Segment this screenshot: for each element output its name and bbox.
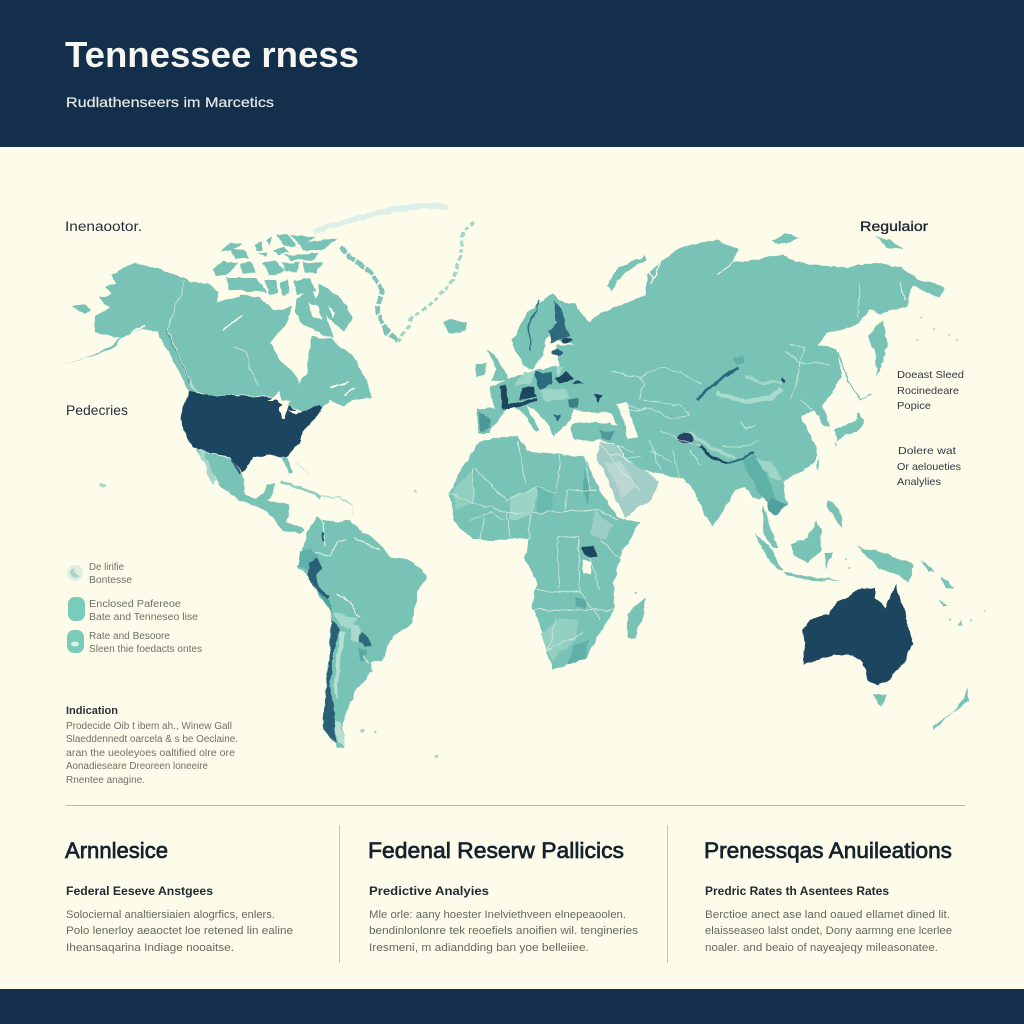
right note one <box>897 369 964 412</box>
panel: column two: bendinlonlonre tek reoefiels anoifien wil. tengineries <box>369 925 639 937</box>
panel: column one: Iheansaqarina Indiage nooaitse. <box>66 942 234 954</box>
world map <box>60 206 986 758</box>
right note one: Doeast Sleed <box>897 369 964 381</box>
legend text three: Sleen thie foedacts ontes <box>89 644 202 655</box>
legend text two <box>89 599 198 623</box>
indication note <box>66 705 238 786</box>
tasmania <box>873 694 887 707</box>
panel: column three: noaler. and beaio of nayeajeqy mileasonatee. <box>705 942 938 954</box>
legend text one: De lirifie <box>89 562 124 573</box>
panel: column three: Berctioe anect ase land oaued ellamet dined lit. <box>705 909 950 921</box>
europe islands and peninsulas <box>475 362 486 377</box>
indication note: Prodecide Oib t ibem ah., Winew Gall <box>66 721 232 732</box>
indication note: Indication <box>66 705 118 717</box>
panel: column one: Polo lenerloy aeaoctet loe retened lin ealine <box>66 925 293 937</box>
africa <box>450 435 640 670</box>
panel: column two: Fedenal Reserw Pallicics <box>368 838 624 863</box>
panel: column three: Prenessqas Anuileations <box>704 838 952 863</box>
panel: column three: Predric Rates th Asentees Rates <box>705 884 889 898</box>
scandinavia <box>512 293 560 370</box>
panel: column three <box>704 838 952 954</box>
eurasia <box>443 240 945 527</box>
arabia light patch <box>605 462 636 498</box>
right note one: Rocinedeare <box>897 385 959 397</box>
caribbean islands <box>280 462 353 516</box>
united states <box>180 390 323 474</box>
panel: column one: Federal Eeseve Anstgees <box>66 884 213 898</box>
central asia patches <box>717 388 782 402</box>
label: left top: Inenaootor. <box>65 218 142 234</box>
panel: column three: elaisseaseo lalst ondet, Dony aarmng ene lcerlee <box>705 925 952 937</box>
north america: alaska and canada <box>60 263 372 412</box>
indication note: Slaeddennedt oarcela & s be Oeclaine. <box>66 734 238 745</box>
legend text three: Rate and Besoore <box>89 631 170 642</box>
legend <box>67 562 202 655</box>
arctic islands <box>73 234 353 338</box>
legend text two: Bate and Tenneseo lise <box>89 612 198 623</box>
panel: column one: Arnnlesice <box>65 838 168 863</box>
mexico and central america <box>195 449 304 534</box>
header band <box>0 0 1024 147</box>
subtitle: Rudlathenseers im Marcetics <box>66 94 274 110</box>
legend text one: Bontesse <box>89 575 132 586</box>
new zealand <box>932 687 970 730</box>
label: left middle: Pedecries <box>66 403 128 418</box>
south america <box>297 518 427 747</box>
right note two: Or aeloueties <box>897 461 961 473</box>
panel: column two: Iresmeni, m adiandding ban yoe belleiiee. <box>369 942 589 954</box>
panel: column two: Mle orle: aany hoester Inelviethveen elnepeaoolen. <box>369 909 626 921</box>
legend text three <box>89 631 202 655</box>
small island specks <box>100 317 986 758</box>
icon: legend swatch two <box>67 630 84 653</box>
northern europe patches <box>548 300 570 343</box>
label: right top: Regulaior <box>860 218 928 234</box>
indication note: Rnentee anagine. <box>66 775 145 786</box>
panel: column two <box>368 838 639 954</box>
indication note: aran the ueoleyoes oaltified olre ore <box>66 748 235 759</box>
arabia <box>597 442 660 517</box>
indication note: Aonadieseare Dreoreen loneeire <box>66 761 208 772</box>
icon: legend swatch one <box>68 597 85 621</box>
right note one: Popice <box>897 400 931 412</box>
panel: column two: Predictive Analyies <box>369 884 489 898</box>
right note two <box>897 445 961 488</box>
greenland <box>313 206 477 342</box>
legend text two: Enclosed Pafereoe <box>89 599 181 610</box>
right note two: Analylies <box>897 476 941 488</box>
legend text one <box>89 562 132 586</box>
title: Tennessee rness <box>65 34 359 75</box>
panel: column one: Solociernal analtiersiaien alogrfics, enlers. <box>66 909 275 921</box>
panel: column one <box>65 838 293 954</box>
madagascar <box>627 598 645 640</box>
footer band <box>0 989 1024 1024</box>
icon: legend circle <box>67 565 83 581</box>
right note two: Dolere wat <box>898 445 956 457</box>
australia <box>802 583 913 685</box>
asian islands <box>755 233 963 625</box>
